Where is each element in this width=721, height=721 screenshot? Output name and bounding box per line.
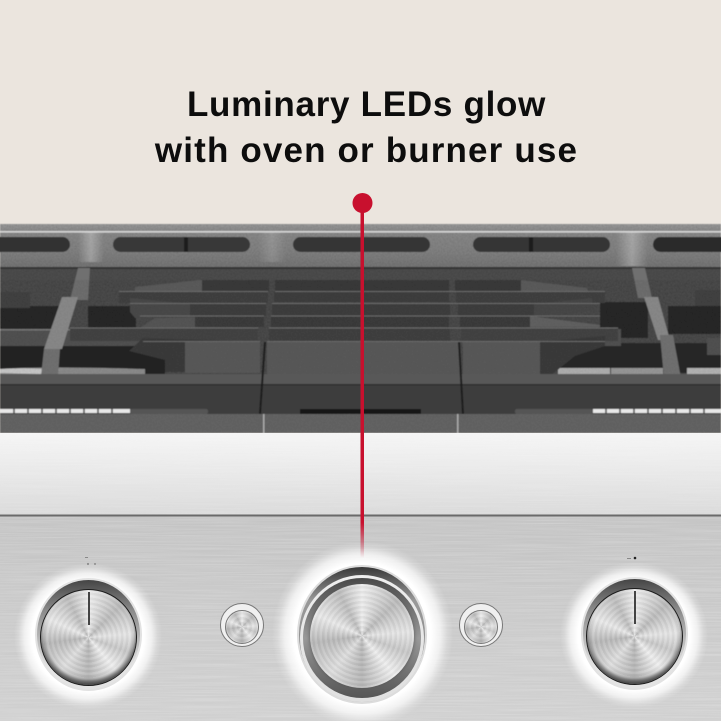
lower trim with burner slits <box>0 409 721 433</box>
title: with oven or burner use <box>155 131 578 170</box>
cooktop well <box>0 267 721 414</box>
control panel <box>0 514 721 721</box>
knob markings <box>85 557 636 565</box>
burner glints <box>0 368 721 381</box>
right knob glow <box>560 562 708 708</box>
steel front lip <box>0 433 721 515</box>
left side grate <box>0 268 258 376</box>
right small button <box>459 603 503 647</box>
centre grate <box>0 280 721 376</box>
left knob <box>35 578 142 691</box>
left small button <box>220 603 264 647</box>
centre knob <box>297 565 427 704</box>
rear rail with slots <box>0 224 721 268</box>
front grate band <box>0 342 721 414</box>
left knob glow <box>14 563 162 709</box>
right knob <box>581 577 688 690</box>
title: Luminary LEDs glow <box>187 85 546 124</box>
title <box>154 85 578 170</box>
right side grate <box>462 268 721 378</box>
centre knob glow <box>272 541 453 721</box>
